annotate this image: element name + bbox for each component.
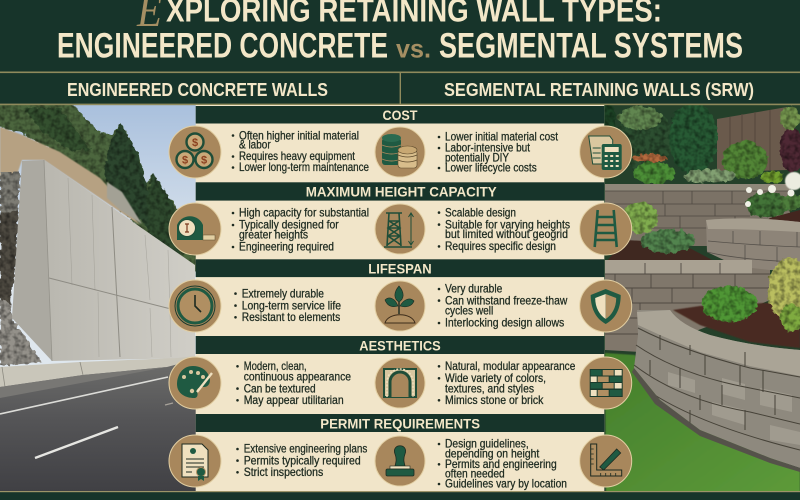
lane markings (0, 377, 168, 414)
text: lifespan segmental: cycles well (445, 304, 493, 318)
icon: paint palette (169, 357, 221, 409)
text: lifespan concrete (234, 286, 341, 324)
right curved wall (706, 218, 800, 270)
icon: rubber stamp (375, 436, 425, 486)
background foliage (596, 102, 800, 184)
text: permit segmental: often needed (445, 467, 505, 481)
text: permit concrete: Strict inspections (244, 465, 323, 479)
text: height concrete: greater heights (239, 228, 308, 242)
text: lifespan segmental: Can withstand freeze-thaw (445, 293, 568, 307)
photo: engineered concrete wall (0, 100, 200, 492)
heading: maximum height capacity: MAXIMUM HEIGHT CAPACITY (306, 184, 497, 200)
icon: tower with height arrow (375, 204, 425, 254)
upper wall (605, 191, 790, 246)
text: lifespan concrete: Extremely durable (242, 286, 324, 300)
text: cost concrete: Often higher initial material (239, 128, 359, 142)
text: cost segmental: potentially DIY (445, 150, 509, 164)
icon: coins: $ (192, 137, 198, 149)
text: cost concrete: Requires heavy equipment (239, 149, 356, 163)
text: cost segmental (438, 130, 559, 175)
heading: aesthetics: AESTHETICS (359, 338, 441, 354)
heading: cost: COST (382, 107, 418, 123)
text: lifespan segmental: Very durable (445, 282, 503, 296)
text: permit concrete: Extensive engineering plans (244, 442, 367, 456)
text: aesthetics segmental: Mimics stone or brick (445, 393, 544, 407)
text: cost segmental: Lower initial material cost (445, 130, 559, 144)
exposed soil slope (0, 127, 140, 225)
column headers (0, 72, 800, 105)
text: aesthetics concrete: May appear utilitarian (244, 393, 344, 407)
grass (605, 353, 800, 492)
concrete wall face (44, 160, 195, 361)
text: lifespan segmental: Interlocking design allows (445, 316, 564, 330)
text: height concrete (232, 206, 369, 254)
front curved wall (634, 310, 800, 468)
heading: lifespan: LIFESPAN (368, 260, 432, 276)
text: cost concrete: & labor (239, 138, 271, 152)
icon: shield (580, 280, 632, 332)
text: permit concrete: Permits typically required (244, 453, 361, 467)
icon: coins: $ (182, 154, 188, 166)
road (0, 358, 197, 492)
text: cost segmental: Lower lifecycle costs (445, 161, 537, 175)
photo: segmental retaining walls (596, 102, 800, 492)
text: permit segmental: Guidelines vary by location (445, 477, 567, 491)
column headers: SEGMENTAL RETAINING WALLS (SRW) (444, 80, 754, 100)
title (57, 0, 743, 65)
icon: coins: $ (201, 154, 207, 166)
wooden fence (717, 107, 787, 172)
forest on hillside (0, 100, 200, 275)
text: permit segmental: depending on height (445, 446, 540, 460)
text: permit segmental: Permits and engineering (445, 457, 557, 471)
column headers: ENGINEERED CONCRETE WALLS (67, 80, 328, 100)
icon: clock (169, 280, 221, 332)
text: permit segmental: Design guidelines, (445, 437, 529, 451)
text: aesthetics segmental: textures, and styles (445, 381, 534, 395)
text: height segmental: but limited without geogrid (445, 227, 568, 241)
concrete buttress (12, 160, 52, 361)
icon: stone arch (375, 358, 425, 408)
text: cost segmental: Labor-intensive but (445, 140, 531, 154)
text: height segmental: Suitable for varying heights (445, 217, 570, 231)
text: height segmental (438, 205, 570, 253)
text: permit concrete (236, 442, 367, 479)
text: aesthetics concrete: Can be textured (244, 381, 316, 395)
text: lifespan concrete: Resistant to elements (242, 310, 340, 324)
title: vs. (396, 33, 431, 63)
lighter stones (668, 372, 800, 445)
text: aesthetics segmental: Natural, modular appearance (445, 359, 576, 373)
text: aesthetics concrete (236, 359, 351, 407)
mulch upper right (765, 210, 800, 222)
text: height segmental: Requires specific design (445, 239, 556, 253)
text: lifespan segmental (438, 282, 568, 330)
text: height concrete: Engineering required (239, 240, 334, 254)
panel: comparison table (0, 105, 800, 500)
header band (0, 0, 800, 106)
text: permit segmental (438, 437, 567, 491)
text: aesthetics concrete: Modern, clean, (244, 359, 307, 373)
text: cost concrete (232, 128, 369, 174)
text: height concrete: High capacity for substantial (239, 206, 369, 220)
flowering shrub (745, 172, 800, 218)
wall joints (49, 178, 172, 357)
middle planting bed (608, 240, 712, 260)
icon: certificate (169, 435, 221, 487)
icon: invoice and calculator (580, 126, 632, 178)
yellow and green shrubs (701, 258, 800, 332)
text: height concrete: Typically designed for (239, 218, 339, 232)
text: height segmental: Scalable design (445, 205, 516, 219)
icon: ladder (580, 203, 632, 255)
icon: ruler and pencil (580, 435, 632, 487)
text: lifespan concrete: Long-term service life (242, 298, 341, 312)
text: cost concrete: Lower long-term maintenance (239, 160, 369, 174)
icon: sprout in soil (375, 281, 425, 331)
rock face (107, 182, 142, 224)
icon: tape measure (169, 203, 221, 255)
icon: coins (169, 126, 221, 178)
icon: stacks of money (375, 127, 425, 177)
middle wall (605, 260, 770, 352)
icon: brick wall (580, 357, 632, 409)
heading: permit requirements: PERMIT REQUIREMENTS (320, 416, 480, 432)
text: aesthetics segmental: Wide variety of colors, (445, 371, 546, 385)
title: ENGINEERED CONCRETE (57, 26, 388, 65)
text: aesthetics segmental (438, 359, 576, 407)
concrete barrier (0, 356, 197, 387)
mulch front bed (673, 303, 800, 348)
text: aesthetics concrete: continuous appearance (244, 370, 351, 384)
